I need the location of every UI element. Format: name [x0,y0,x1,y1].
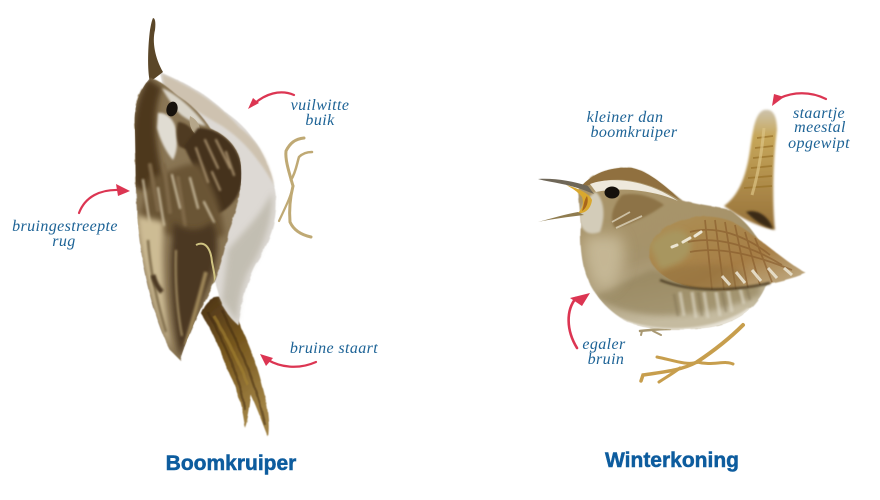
eye [604,186,620,198]
legs and claws [279,138,312,237]
arrow: egaler bruin [569,293,590,348]
label: staartje meestal opgewipt: staartje [793,105,845,122]
eye [165,100,179,118]
label: egaler bruin: egaler [582,336,626,353]
arrow: staartje meestal opgewipt [772,93,826,106]
body [578,168,768,329]
bird: winterkoning [538,110,806,382]
arrow: vuilwitte buik [248,92,294,109]
wing [649,216,806,290]
label: bruingestreepte rug: bruingestreepte [12,218,118,235]
title: Boomkruiper: Boomkruiper [166,452,296,475]
label: kleiner dan boomkruiper: boomkruiper [590,124,678,141]
beak [538,179,594,194]
beak [148,18,163,82]
arrow: bruingestreepte rug [79,184,130,213]
arrow: bruine staart [260,354,316,367]
head markings [575,166,680,200]
label: vuilwitte buik: vuilwitte [291,97,349,114]
label: bruine staart: bruine staart [290,340,378,357]
label: staartje meestal opgewipt: meestal [794,119,846,136]
head, back and wing [135,78,241,360]
label: vuilwitte buik: buik [305,112,335,129]
title: Winterkoning: Winterkoning [605,449,739,472]
label: staartje meestal opgewipt: opgewipt [788,135,850,152]
tail [724,110,777,230]
belly [160,72,276,325]
label: egaler bruin: bruin [588,351,624,368]
label: bruingestreepte rug: rug [52,233,76,250]
bird: boomkruiper [132,18,312,437]
legs [640,325,743,382]
tail [201,297,269,437]
label: kleiner dan boomkruiper: kleiner dan [587,109,663,126]
